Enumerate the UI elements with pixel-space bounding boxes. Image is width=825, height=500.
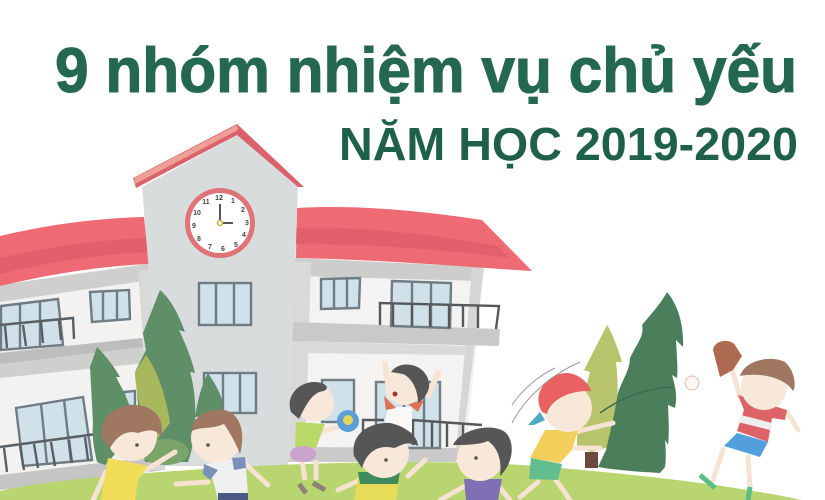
tree: tall pine bbox=[136, 290, 195, 462]
left wing windows bbox=[1, 290, 135, 466]
trees left bbox=[90, 290, 222, 465]
clock: 9 bbox=[192, 223, 196, 230]
clock: 4 bbox=[242, 232, 246, 239]
clock: 3 bbox=[245, 220, 249, 227]
ground: grass hill bbox=[0, 462, 802, 500]
clock: 11 bbox=[202, 199, 210, 206]
child: boy with red cap bbox=[512, 362, 613, 500]
child: boy with glove bbox=[700, 341, 798, 500]
title: 9 nhóm nhiệm vụ chủ yếu bbox=[55, 36, 797, 106]
left wing balconies bbox=[0, 318, 96, 472]
tower windows bbox=[199, 283, 256, 413]
child: white shirt boy bbox=[176, 410, 268, 500]
left roof bbox=[0, 217, 149, 286]
right wing wall bbox=[285, 258, 500, 462]
tree: tall green pine bbox=[598, 292, 683, 473]
subtitle: NĂM HỌC 2019-2020 bbox=[339, 118, 798, 170]
tree: left small pine bbox=[90, 347, 130, 465]
tree: yellow-green pine bbox=[135, 355, 170, 448]
children bbox=[93, 341, 798, 500]
school building bbox=[0, 124, 532, 490]
child: boy with purple shirt bbox=[440, 428, 512, 500]
right wing windows bbox=[321, 278, 451, 448]
tower bbox=[133, 124, 304, 466]
dark swoosh line bbox=[600, 387, 673, 413]
trees right bbox=[577, 292, 683, 473]
clock bbox=[185, 188, 255, 258]
clock: 2 bbox=[241, 207, 245, 214]
right roof bbox=[296, 207, 532, 271]
child: boy with green collar bbox=[338, 423, 425, 500]
tree: yellow-green pine bbox=[577, 325, 622, 452]
child: girl with ball bbox=[290, 382, 359, 493]
child: yellow shirt boy bbox=[93, 405, 175, 500]
clock: 12 bbox=[215, 195, 223, 202]
left wing wall bbox=[0, 262, 165, 490]
clock: 10 bbox=[193, 210, 201, 217]
tree: small pine behind boy bbox=[195, 373, 222, 417]
clock: 8 bbox=[197, 236, 201, 243]
child: shouting girl bbox=[383, 364, 438, 432]
bush bbox=[141, 439, 189, 465]
baseball bbox=[685, 376, 699, 390]
right wing balcony railings bbox=[363, 303, 499, 447]
clock: 5 bbox=[234, 242, 238, 249]
clock: 7 bbox=[208, 244, 212, 251]
clock: 6 bbox=[221, 246, 225, 253]
clock: 1 bbox=[231, 198, 235, 205]
